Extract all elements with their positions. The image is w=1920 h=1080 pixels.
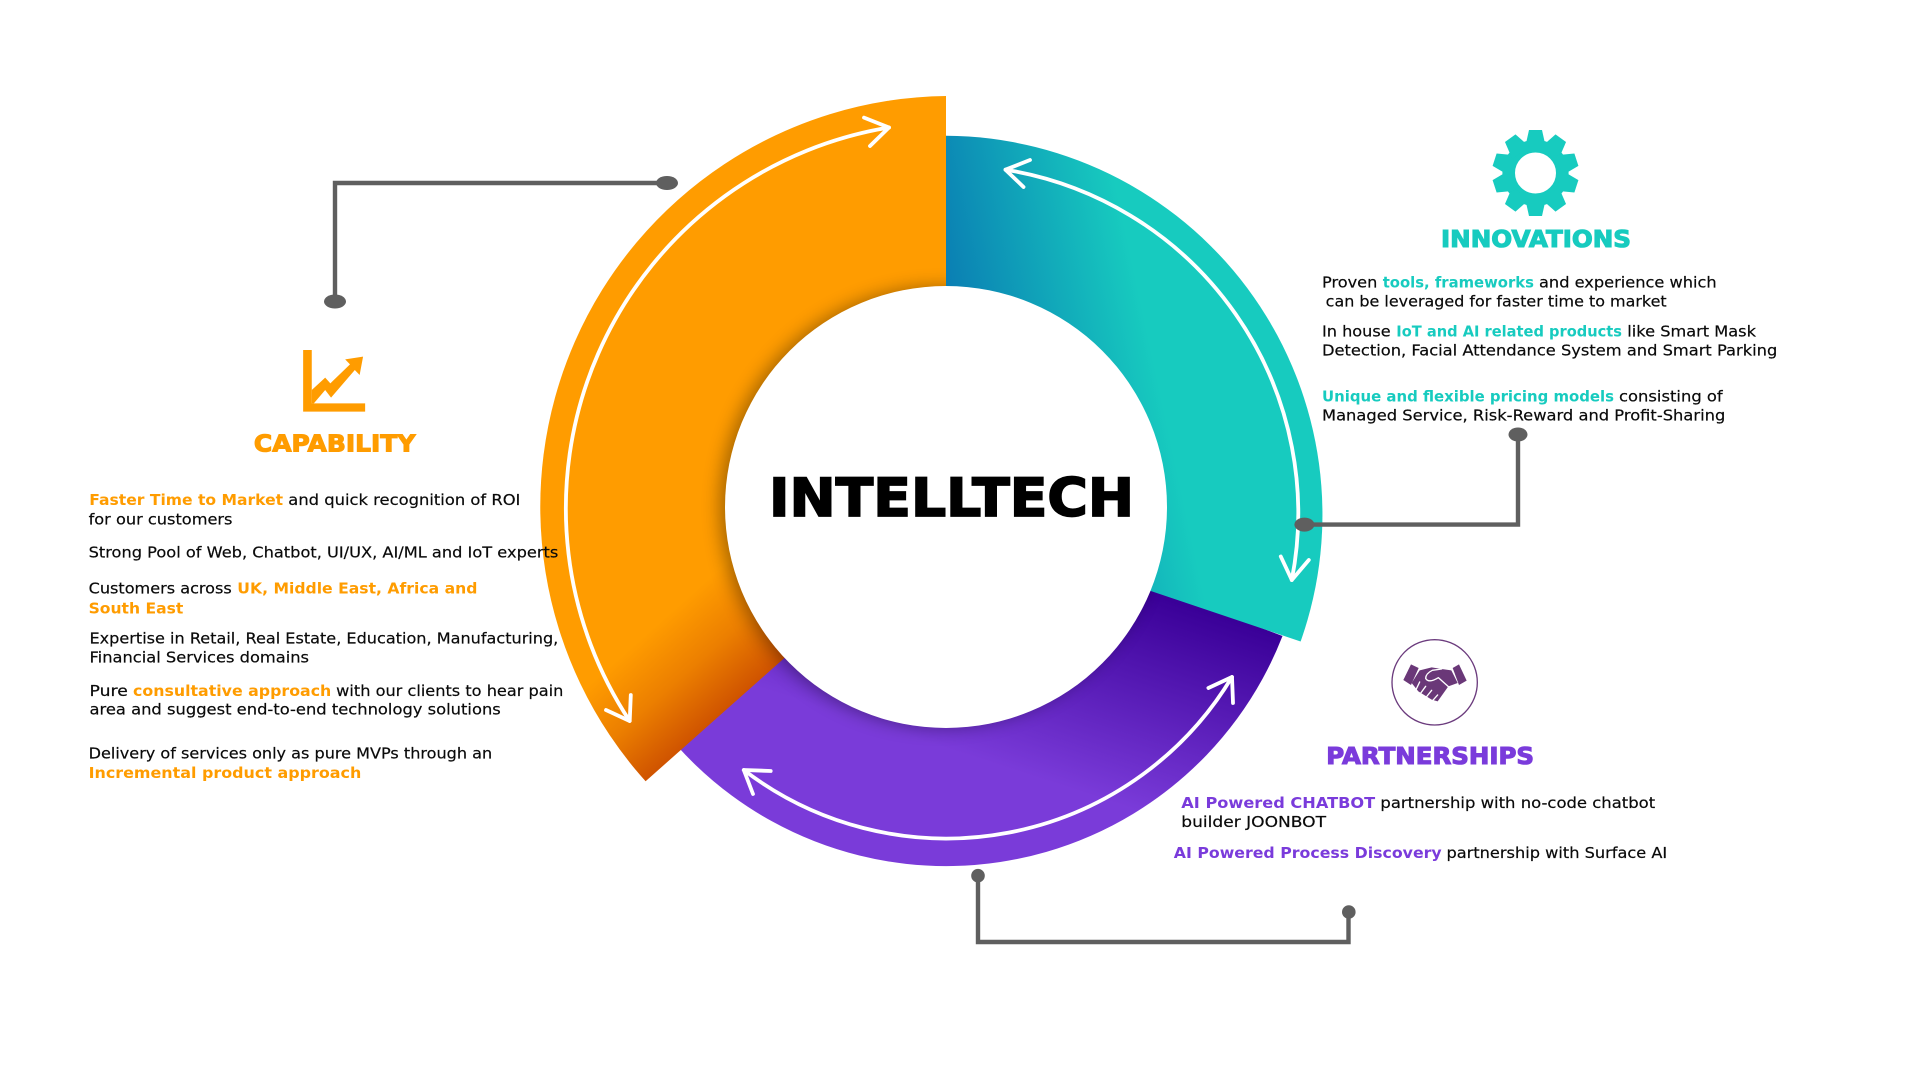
segment: capability (540, 96, 946, 781)
text: partnerships points: partnership with no-code chatbot (1380, 794, 1655, 812)
heading: capability: CAPABILITY (254, 430, 416, 458)
connector: partnerships (971, 869, 1356, 942)
heading: partnerships: PARTNERSHIPS (1326, 742, 1534, 770)
centre circle (725, 286, 1167, 728)
text: capability points: South East (89, 600, 184, 618)
text: partnerships points: partnership with Surface AI (1446, 844, 1667, 862)
icon: growth chart (303, 350, 365, 412)
text: capability points (89, 491, 563, 782)
text: capability points: Expertise in Retail, Real Estate, Education, Manufacturing, (90, 630, 558, 648)
text: innovations points: Detection, Facial Attendance System and Smart Parking (1322, 342, 1777, 360)
segment: partnerships (664, 507, 1282, 866)
inner shadow (720, 287, 1160, 727)
text: innovations points: Managed Service, Risk-Reward and Profit-Sharing (1322, 406, 1725, 424)
text: capability points: UK, Middle East, Africa and (237, 580, 477, 598)
text: capability points: Delivery of services only as pure MVPs through an (89, 745, 492, 763)
panel: capability (89, 350, 563, 782)
heading: innovations: INNOVATIONS (1441, 225, 1631, 253)
arrow: capability cycle (566, 118, 889, 721)
text: partnerships points: AI Powered CHATBOT (1181, 794, 1376, 812)
text: capability points: Incremental product approach (89, 764, 361, 782)
arrow: innovations cycle (1006, 160, 1309, 580)
text: capability points: Strong Pool of Web, Chatbot, UI/UX, AI/ML and IoT experts (89, 544, 558, 562)
text: capability points: consultative approach (133, 682, 331, 700)
text: capability points: Pure (90, 682, 128, 700)
text: capability points: Faster Time to Market (89, 491, 284, 509)
icon: gear (1491, 130, 1580, 216)
text: capability points: with our clients to hear pain (336, 682, 563, 700)
text: capability points: area and suggest end-to-end technology solutions (90, 701, 501, 719)
text: innovations points: IoT and AI related products (1396, 323, 1622, 341)
text: capability points: Financial Services domains (90, 649, 309, 667)
text: innovations points (1322, 274, 1777, 424)
text: innovations points: like Smart Mask (1627, 323, 1756, 341)
text: innovations points: Unique and flexible pricing models (1322, 387, 1614, 405)
connector: innovations (1294, 428, 1528, 532)
text: innovations points: Proven (1322, 274, 1377, 292)
centre title: INTELLTECH (769, 468, 1134, 529)
segment: innovations (946, 136, 1322, 641)
text: partnerships points: builder JOONBOT (1181, 813, 1327, 831)
panel: partnerships (1174, 640, 1667, 862)
text: capability points: and quick recognition of ROI (288, 491, 520, 509)
text: capability points: for our customers (89, 510, 232, 528)
text: innovations points: consisting of (1619, 387, 1723, 405)
text: innovations points: and experience which (1539, 274, 1717, 292)
connector: capability (324, 176, 678, 308)
text: partnerships points (1174, 794, 1667, 862)
icon: handshake (1392, 640, 1477, 725)
text: innovations points: can be leveraged for faster time to market (1326, 292, 1667, 310)
text: innovations points: In house (1322, 323, 1391, 341)
text: innovations points: tools, frameworks (1383, 274, 1534, 292)
text: capability points: Customers across (89, 580, 232, 598)
arrow: partnerships cycle (744, 677, 1233, 838)
text: partnerships points: AI Powered Process Discovery (1174, 844, 1442, 862)
panel: innovations (1322, 130, 1777, 424)
donut chart (540, 96, 1322, 866)
